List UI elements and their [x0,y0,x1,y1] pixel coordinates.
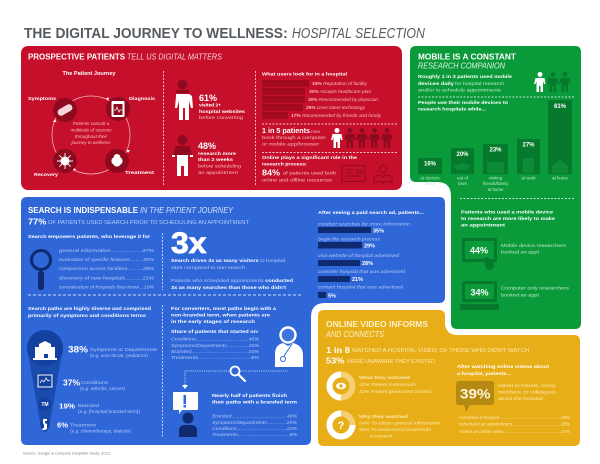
text: after watching online videos: After watching online videos about [457,364,549,370]
list: actions after video: scheduled an appointment.......................................28% [459,422,570,426]
list: search uses: consideration of hospitals they know....10% [59,284,154,290]
patient journey cycle: Recovery [34,172,58,178]
icon: five people [331,128,392,148]
list: finish paths: Branded.......................................46% [212,414,297,418]
chart: what users look for: What users look for in a hospital [262,72,347,78]
stat: online plays a role: of patients used both [283,170,336,176]
text: more likely to make an appointment: Patients who used a mobile device [461,210,553,216]
stat: 1 in 8 and 53 percent: 53% [326,356,344,366]
text: why they watched: 64% To obtain general information [359,420,441,426]
icon: medical cross [105,149,129,173]
chart: after paid search ad [318,210,424,300]
patient journey cycle: The Patient Journey [62,71,116,77]
list: share of patients started on: Symptoms/Departments...............25% [171,343,259,348]
stat: 3x: 3x [171,227,207,260]
stat: 37 percent: 37% [63,378,80,388]
chart: after paid search ad: consider hospital that was advertised [318,269,406,274]
panel: search [21,197,445,445]
funnel: search terms: TM [41,402,49,408]
callout: 39 percent [456,381,494,412]
stat: 6 percent: 6% [57,422,69,430]
stat: 3x: Search drives 3x as many visitors to hospital [171,258,285,264]
text: talked to friends: talked to friends, family [498,383,557,389]
stat: 77 percent: 77% [28,216,47,226]
chart: after paid search ad: 28% [362,261,373,267]
chart: after paid search ad: conduct searches for more information [318,222,411,226]
icon: person 48 percent [172,135,193,176]
bar chart: where mobile is used: 61% [554,104,567,110]
stat: tablet 44 percent: Mobile device researchers [501,243,567,249]
stat: online plays a role: online and offline resources [262,178,333,184]
icon: person 61 percent [175,80,193,120]
stat: 37 percent [63,378,126,391]
text: talked to friends: members, or colleagues [498,390,557,396]
stat: 1 in 5 patients [262,128,326,148]
stat: 37 percent: Conditions [81,380,109,386]
text: what they watched [359,375,432,394]
stat: 6 percent: Treatment [70,422,97,428]
bar chart: where mobile is used: at home [488,187,504,192]
stat: online plays a role: 84% [262,168,280,178]
stat: 1 in 8 and 53 percent: 1 in 8 [326,346,351,355]
chart: what users look for: 29% Uses latest technology [305,105,366,110]
bar chart: where mobile is used: 16% [424,162,437,168]
list: share of patients started on: Conditions....................................46% [171,336,259,342]
cycle caption: throughout their [75,134,108,139]
chart: after paid search ad: visit website of hospital advertised [318,253,400,258]
icon: online and offline resources [342,166,392,183]
stat: 3x [171,227,293,291]
stat: tablet 44 percent: booked an appt [501,250,540,256]
source: Source: Google & Compete Hospitals Study, 2012. [23,452,111,456]
stat: 3x: 3x as many searches than those who didn't [171,285,286,291]
stat: computer 34 percent: booked an appt [501,292,540,298]
stat: 19 percent [59,402,141,414]
bar chart: where mobile is used: at doctors [420,176,440,180]
stat: online plays a role: research process: [262,162,307,168]
stat: 77 percent [28,216,250,226]
text: search paths: Search paths are highly diverse and comprised [28,306,151,312]
stat: 48 percent: an appointment [198,170,239,176]
stat: 38 percent [68,344,158,358]
stat: 19 percent: Branded [78,403,99,409]
list: share of patients started on: Share of patients that started on: [171,329,259,335]
bar chart: where mobile is used: office [425,181,436,186]
bar chart: where mobile is used: out of [457,176,469,180]
connector: dotted path with magnifier [182,366,288,389]
text: people use mobile devices: research hospitals while... [418,106,486,112]
text: 1 in 3 patients: and/or to schedule appointments [418,88,502,94]
text: nearly half: their paths with a branded term [212,400,297,406]
stat: computer 34 percent: Computer only researchers [501,286,570,292]
chart: after paid search ad: 35% [373,228,384,234]
icon: person with alert bubble [173,392,198,437]
chart: after paid search ad: contact hospital that was advertised [318,284,404,290]
chart: what users look for: 30% Recommended by physician [308,97,379,102]
text: nearly half: Nearly half of patients finish [212,393,287,399]
stat: computer 34 percent: 34% [470,288,488,298]
stat: online plays a role: Online plays a significant role in the [262,155,357,161]
stat: 3x: Patients who scheduled appointments conducted [171,278,293,284]
text: why they watched: Why they watched [359,414,408,420]
stat: 61 percent: before converting [199,115,243,121]
bar chart: where mobile is used: at home [552,176,568,180]
text: 1 in 3 patients: devices daily [418,81,454,87]
cycle caption: Patients consult a [73,121,110,126]
list: actions after video: visited an online video..............................................27% [459,429,570,434]
stat: 48 percent: before scheduling [198,164,241,170]
icon: magnifier [32,250,50,290]
text: why they watched [359,414,441,438]
stat: 1 in 5 patients: book through a computer [262,135,326,141]
text: 1 in 3 patients: for hospital research [455,81,504,87]
cycle caption: multitude of sources [70,128,112,132]
list: finish paths: Symptoms/Departments..............25% [212,420,297,425]
text: for converters: For converters, most paths begin with a [171,306,276,312]
stat: 61 percent: 61% [199,93,217,103]
stat: 3x: sites compared to non-search [171,265,245,271]
cycle caption: journey to wellness [70,140,111,145]
bar chart: where mobile is used: 20% [456,152,469,158]
stat: 6 percent: (e.g. chemotherapy, dialysis) [70,428,132,434]
bar chart: where mobile is used [418,100,572,192]
text: what they watched: What they watched [359,375,410,381]
heading: mobile: MOBILE IS A CONSTANT [418,52,516,62]
patient journey cycle: Symptoms [28,96,56,102]
stat: 6 percent [57,422,132,434]
stat: 38 percent: (e.g. sore throat, pediatrics) [90,353,149,358]
panel: online video [318,310,580,446]
list: search uses [59,248,154,290]
list: finish paths [212,414,297,437]
donut: what they watched [330,374,352,398]
chart: after paid search ad: 21% [352,277,363,283]
list: share of patients started on: Branded......................................10% [171,349,259,354]
heading: search: SEARCH IS INDISPENSABLEIN THE PATIENT JOURNEY [28,206,234,215]
stat: 61 percent [199,93,245,121]
stat: 1 in 8 and 53 percent: WERE UNAWARE THEY EXISTED [347,359,435,365]
subheading: online video: AND CONNECTS [325,330,385,339]
chart: after paid search ad: After seeing a paid search ad, patients... [318,210,424,216]
stat: 61 percent: hospital websites [199,109,245,115]
list: share of patients started on [171,329,259,360]
text: after watching online videos: a hospital, patients... [457,371,511,377]
list: actions after video: contacted a hospital..................................................29% [459,415,570,420]
list: finish paths: Conditions...................................22% [212,426,297,431]
icon: sun [53,149,77,173]
text: search paths: primarily of symptoms and conditions terms [28,313,146,319]
text: more likely to make an appointment: an appointment [461,222,505,228]
panel: mobile [410,46,581,329]
text: 1 in 3 patients [418,74,512,94]
stat: 61 percent: visited 2+ [199,102,221,108]
chart: after paid search ad: begin the research process [318,236,381,242]
text: people use mobile devices: People use their mobile devices to [418,100,508,106]
stat: tablet 44 percent [462,238,567,270]
stat: 38 percent: 38% [68,344,88,354]
chart: what users look for: 34% Reputation of facility [312,81,368,86]
panel: prospective patients [21,46,402,190]
list: search uses: general information...................37% [59,248,154,253]
stat: 77 percent: OF PATIENTS USED SEARCH PRIOR TO SCHEDULING AN APPOINTMENT [48,220,250,226]
stat: 1 in 5 patients: or mobile app/browser [262,142,319,148]
stat: 1 in 5 patients: now [311,130,320,135]
stat: 48 percent: 48% [198,141,216,151]
bar chart: where mobile is used: friends/family [483,181,509,186]
heading: online video: ONLINE VIDEO INFORMS [326,320,429,329]
stat: 48 percent [198,141,241,176]
list: finish paths: Treatments....................................6% [212,432,297,437]
list: search uses: discovery of new hospitals...........21% [59,276,154,280]
text: talked to friends: about the hospital [498,396,543,402]
stat: 1 in 8 and 53 percent: WATCHED A HOSPITAL VIDEO; OF THOSE WHO DIDN'T WATCH [352,348,529,354]
stat: computer 34 percent [460,281,570,310]
patient journey cycle [28,71,155,178]
stat: 1 in 8 and 53 percent [326,346,529,366]
list: search uses: comparison across facilities..........28% [59,266,154,271]
list: search uses: evaluation of specific features.........20% [59,257,154,262]
stat: 19 percent: 19% [59,402,75,410]
patient journey cycle: Diagnosis [129,96,155,102]
bar chart: where mobile is used: visiting [489,176,503,180]
icon: clipboard [106,97,130,121]
chart: what users look for: 30% Accepts healthcare plan [309,89,372,94]
text: why they watched: 50% To understand treatments [359,427,432,432]
stat: 37 percent: (e.g. arthritis, cancer) [80,386,126,391]
icon: bandage [53,98,77,122]
title: THE DIGITAL JOURNEY TO WELLNESS: HOSPITAL SELECTION [24,26,425,42]
stat: 1 in 5 patients: 1 in 5 patients [262,128,310,135]
bar chart: where mobile is used: town [458,181,468,186]
text: 1 in 3 patients: Roughly 1 in 3 patients used mobile [418,74,512,80]
text: what they watched: 40% Patient testimonials [359,382,417,387]
stat: 19 percent: (e.g. [hospital branded term]) [78,409,141,414]
icon: doctor [275,328,303,367]
stat: tablet 44 percent: 44% [470,246,488,256]
chart: what users look for: 17% Recommended by friends and family [291,113,382,118]
text: for converters: non-branded term, when patients are [171,312,270,318]
subheading: mobile: RESEARCH COMPANION [418,62,505,70]
donut: why they watched [330,414,352,437]
stat: online plays a role [262,155,357,184]
text: for converters: in the early stages of research [171,319,255,325]
chart: what users look for [262,72,382,119]
bar chart: where mobile is used: at work [521,176,536,180]
bar chart: where mobile is used: 23% [489,148,502,154]
patient journey cycle: Treatment [125,170,154,176]
stat: 48 percent: than 2 weeks [198,157,233,163]
text: search empowers patients: Search empowers patients, who leverage it for [28,234,150,240]
text: what they watched: 32% Patient-generated content [359,389,432,394]
icon: three people [534,72,570,92]
funnel: search terms [27,330,63,432]
text: more likely to make an appointment: to research are more likely to make [461,216,555,222]
bar chart: where mobile is used: 27% [522,142,535,148]
donut: why they watched: ? [338,420,345,432]
heading: prospective patients: PROSPECTIVE PATIENTSTELL US DIGITAL MATTERS [28,52,223,62]
list: actions after video [459,415,570,434]
chart: after paid search ad: 29% [364,244,375,250]
list: share of patients started on: Treatments...................................6% [171,355,259,360]
stat: 48 percent: research more [198,151,236,157]
text: why they watched: or research [370,434,393,438]
chart: after paid search ad: 5% [328,294,336,300]
stat: 38 percent: Symptoms or Departments [90,347,158,353]
callout: 39 percent: 39% [460,386,491,402]
